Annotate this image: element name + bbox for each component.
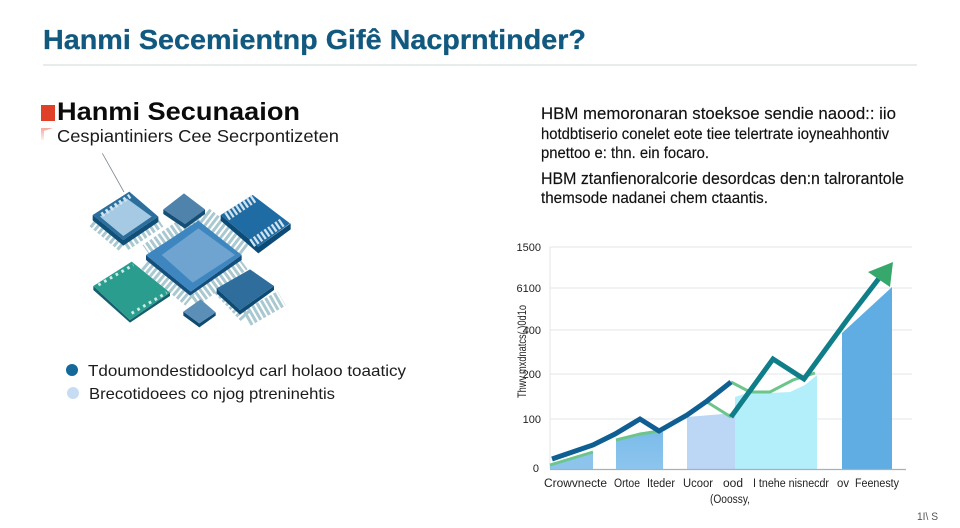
icon: semiconductor chip cluster xyxy=(93,153,291,327)
bullet list xyxy=(66,363,406,403)
chip: upper right xyxy=(221,195,291,253)
title: Hanmi Secemientnp Gifê Nacprntinder? xyxy=(43,24,586,55)
icon: pale red marker xyxy=(41,128,53,140)
section heading: Hanmi Secunaaion xyxy=(57,98,300,126)
chip: upper left xyxy=(93,192,158,246)
x axis labels: Iteder xyxy=(647,478,675,490)
bar 3 xyxy=(687,413,735,469)
x axis labels: I tnehe nisnecdr xyxy=(753,478,829,490)
y axis title: Thwv.mxdnatcs(.)0d1o xyxy=(515,305,529,398)
chip: bottom small xyxy=(183,299,216,327)
y axis labels: 200 xyxy=(523,369,541,381)
footer mark: 1I\ S xyxy=(917,511,938,523)
text block: right description xyxy=(541,104,904,207)
x axis labels: Ortoe xyxy=(614,478,640,490)
y axis labels xyxy=(517,242,541,475)
x axis labels: Ucoor xyxy=(683,478,713,490)
x axis labels: ov xyxy=(837,478,849,490)
y axis labels: 0 xyxy=(533,463,539,475)
y axis labels: 1500 xyxy=(517,242,541,254)
text block: right description: pnettoo e: thn. ein focaro. xyxy=(541,145,709,162)
x axis labels: ood xyxy=(723,478,743,490)
arrow head xyxy=(868,262,893,287)
bar 5 xyxy=(842,287,892,469)
section subheading: Cespiantiniers Cee Secrpontizeten xyxy=(57,126,339,146)
x axis labels: Crowvnecte xyxy=(544,478,607,490)
text block: right description: themsode nadanei chem ctaantis. xyxy=(541,190,768,207)
icon: red square marker xyxy=(41,105,55,121)
bar 1 xyxy=(550,452,593,469)
dark blue growth line xyxy=(552,382,731,459)
chip: green xyxy=(93,262,170,323)
y axis labels: 6100 xyxy=(517,283,541,295)
y axis labels: 100 xyxy=(523,414,541,426)
bullet dot: light xyxy=(67,387,79,399)
bullet text one: Tdoumondestidoolcyd carl holaoo toaaticy xyxy=(88,363,406,380)
chip: lower right xyxy=(217,269,274,315)
text block: right description: HBM memoronaran stoeksoe sendie naood:: iio xyxy=(541,104,896,123)
x axis labels: Feenesty xyxy=(855,478,899,490)
x axis labels: (Ooossy, xyxy=(710,494,750,506)
chip: central processor xyxy=(146,221,242,296)
x axis labels xyxy=(544,478,899,506)
green trend line xyxy=(550,373,815,465)
bullet text two: Brecotidoees co njog ptreninehtis xyxy=(89,386,335,403)
bar 2 xyxy=(616,432,663,469)
bar 4 xyxy=(735,375,817,469)
chip: top small xyxy=(163,193,205,229)
y axis labels: 400 xyxy=(523,325,541,337)
text block: right description: HBM ztanfienoralcorie desordcas den:n talrorantole xyxy=(541,169,904,188)
teal growth line xyxy=(731,277,880,417)
bullet dot: dark xyxy=(66,364,78,376)
line and bar chart xyxy=(515,242,912,506)
panel: left heading xyxy=(41,98,339,146)
text block: right description: hotdbtiserio conelet eote tiee telertrate ioyneahhontiv xyxy=(541,126,889,143)
